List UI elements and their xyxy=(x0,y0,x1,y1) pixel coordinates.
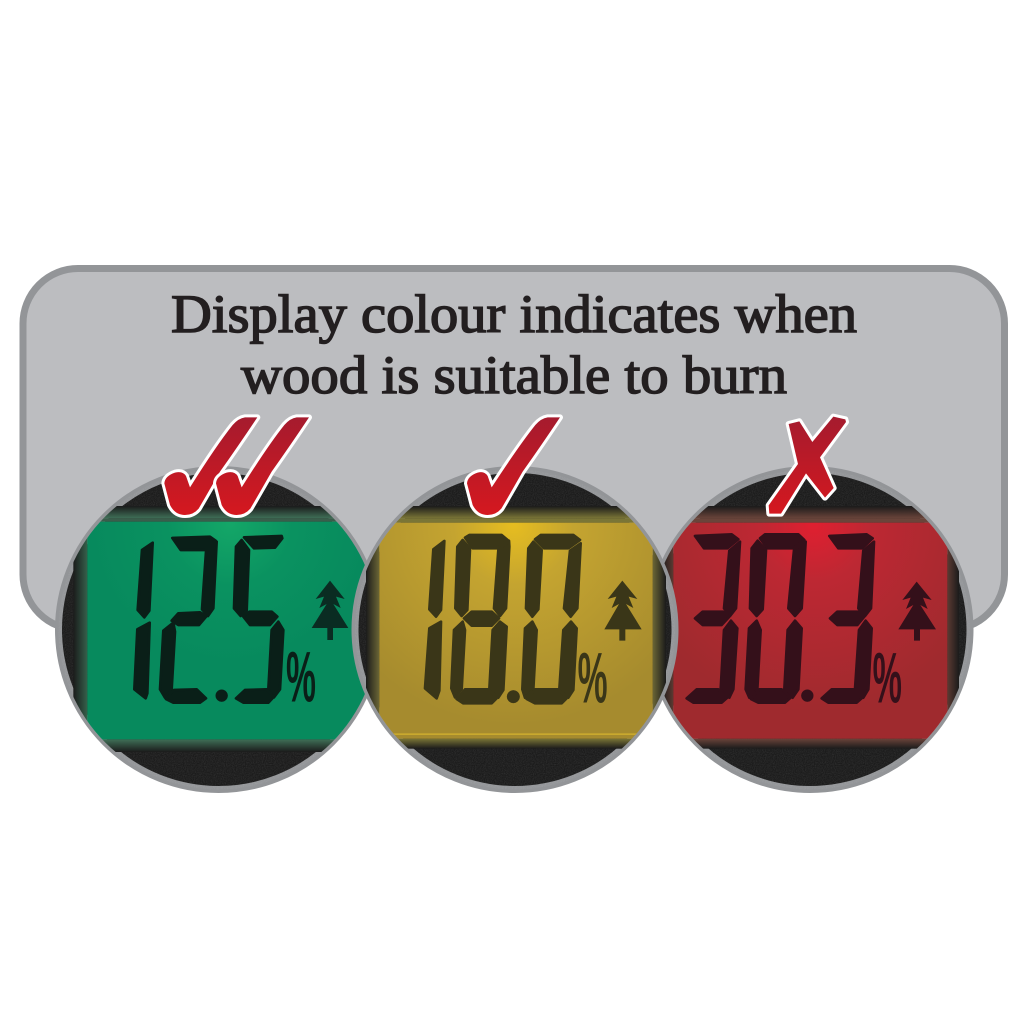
title: display colour explanation xyxy=(171,284,857,405)
icon: tree xyxy=(604,581,642,641)
percent sign: % xyxy=(873,638,902,718)
digits 1 2 5 . xyxy=(134,536,283,703)
percent sign: % xyxy=(578,637,608,718)
green moisture display: 12.5% xyxy=(50,466,390,796)
icon: tree xyxy=(312,581,348,640)
green LCD screen xyxy=(87,522,381,739)
panel: grey rounded background xyxy=(23,268,1004,630)
red LCD screen xyxy=(673,523,947,739)
digits 1 8 . 0 xyxy=(425,535,581,703)
icon: cross on red xyxy=(769,417,846,514)
yellow LCD screen xyxy=(379,523,653,739)
red moisture display: 30.3% xyxy=(662,467,974,793)
percent sign: % xyxy=(286,636,316,717)
title: display colour explanation: Display colour indicates when xyxy=(171,284,857,344)
icon: single tick on yellow xyxy=(467,417,560,515)
yellow moisture display: 18.0% xyxy=(350,466,690,796)
icon: double tick on green xyxy=(164,417,309,515)
title: display colour explanation: wood is suitable to burn xyxy=(241,345,787,405)
digits 3 0 . 3 xyxy=(687,534,874,703)
icon: tree xyxy=(898,582,936,641)
